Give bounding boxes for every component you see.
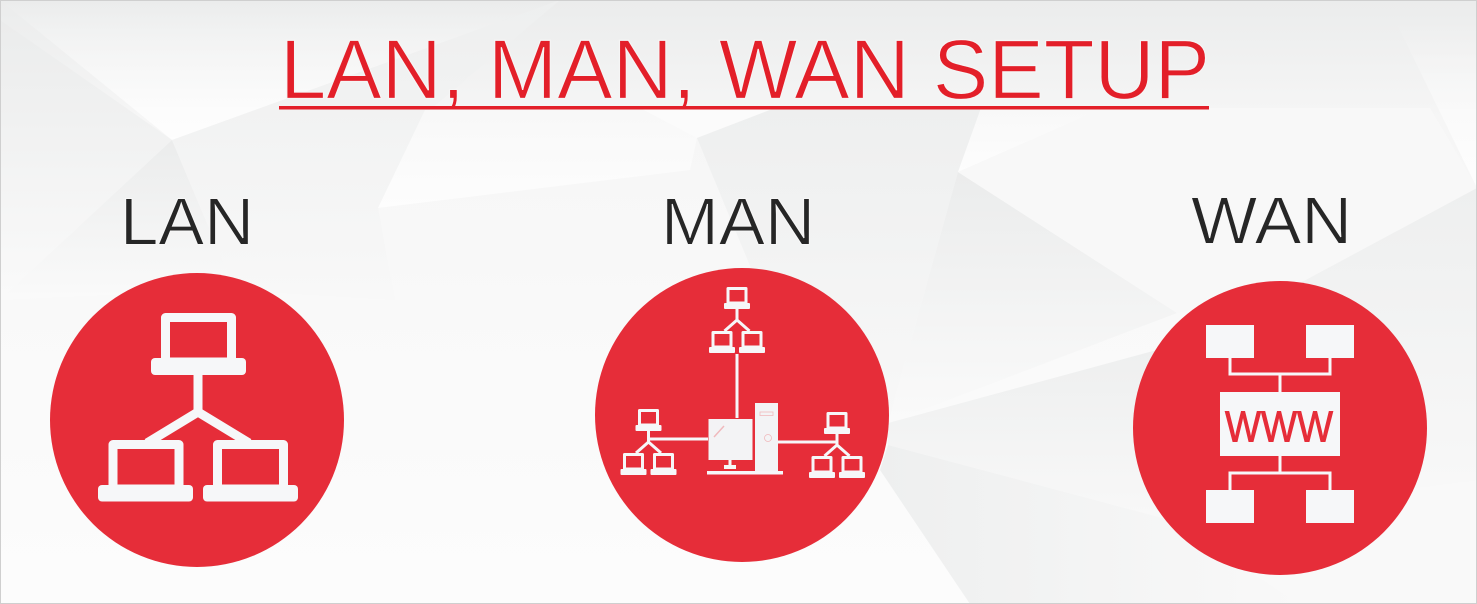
icon: MAN network: [620, 288, 865, 478]
panel: MAN circle: [595, 268, 889, 562]
icon: WAN network: [1206, 325, 1354, 523]
text: WWW: WWW: [1225, 402, 1333, 452]
heading: LAN: LAN: [120, 184, 254, 260]
panel: WAN circle: [1133, 281, 1427, 575]
heading: MAN: MAN: [661, 184, 815, 260]
heading: WAN: WAN: [1191, 184, 1352, 258]
icon: LAN network: [98, 318, 298, 502]
panel: LAN circle: [50, 273, 344, 567]
title: LAN, MAN, WAN SETUP: [280, 22, 1210, 116]
